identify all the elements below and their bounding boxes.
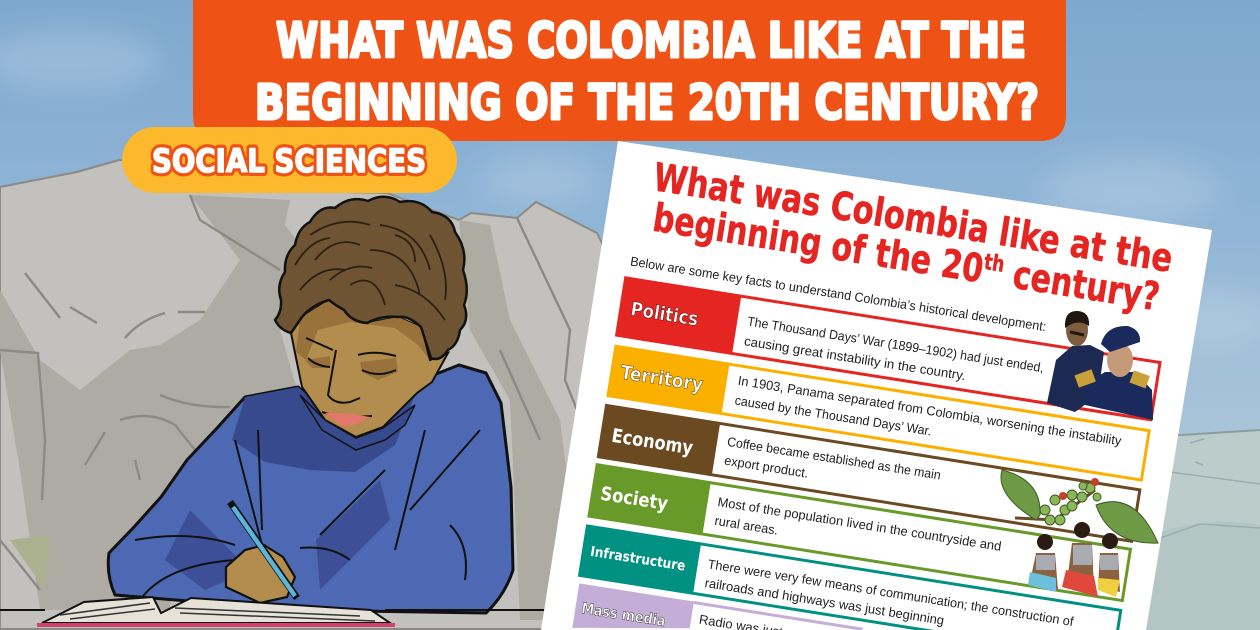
row: economy: Coffee became established as the main — [726, 434, 942, 483]
worksheet title: th — [982, 250, 1006, 278]
row: economy — [597, 404, 1140, 542]
eyes, nose and mouth — [306, 338, 396, 416]
worksheet content — [569, 153, 1180, 630]
illustration: women — [1028, 522, 1120, 597]
title banner — [193, 0, 1066, 141]
background: hazy valley — [1100, 430, 1260, 630]
worksheet title: century? — [999, 251, 1163, 320]
background: clouds — [0, 30, 1260, 350]
row: mass media — [572, 583, 863, 630]
hand — [226, 545, 295, 603]
row: society: Most of the population lived in the countryside and — [717, 494, 1002, 554]
hair curls — [295, 222, 446, 320]
sweater creases — [135, 430, 480, 600]
worksheet title: beginning of the 20 — [650, 196, 1083, 308]
banner heading — [255, 13, 1039, 131]
row: territory — [607, 345, 1149, 481]
row: economy: Economy — [610, 425, 695, 459]
face — [291, 300, 448, 437]
row: infrastructure — [578, 525, 1121, 630]
row: infrastructure: Infrastructure — [589, 544, 686, 575]
row: politics: causing great instability in the country. — [743, 333, 967, 383]
background: rocks — [0, 160, 610, 629]
sweater — [108, 365, 513, 613]
row: territory: caused by the Thousand Days’ War. — [734, 393, 933, 439]
row: economy: export product. — [723, 453, 810, 481]
row: society: rural areas. — [714, 513, 779, 538]
row: infrastructure: There were very few means of communication; the construction of — [707, 556, 1075, 629]
book — [42, 597, 390, 623]
badge: social sciences — [122, 127, 457, 193]
pencil — [230, 502, 297, 598]
banner heading: WHAT WAS COLOMBIA LIKE AT THE — [276, 13, 1026, 69]
row: politics: Politics — [629, 298, 700, 331]
badge: social sciences: SOCIAL SCIENCES — [152, 142, 426, 180]
row: politics — [615, 277, 1160, 421]
row: infrastructure: railroads and highways was just beginning — [704, 575, 945, 628]
hair — [275, 197, 467, 359]
row: territory: In 1903, Panama separated from Colombia, worsening the instability — [737, 373, 1123, 448]
intro text: Below are some key facts to understand Colombia’s historical development: — [629, 254, 1047, 334]
row: politics: The Thousand Days’ War (1899–1902) had just ended, — [746, 314, 1045, 375]
row: society — [588, 464, 1131, 602]
badge: social sciences: SOCIAL SCIENCES — [152, 142, 426, 180]
banner heading: BEGINNING OF THE 20TH CENTURY? — [255, 75, 1039, 131]
row: society: Society — [599, 483, 670, 515]
row: territory: Territory — [619, 361, 705, 396]
illustration: boy writing — [42, 197, 513, 623]
illustration: coffee branch — [1001, 470, 1158, 543]
collar — [300, 395, 415, 450]
table edge — [0, 610, 545, 627]
worksheet page — [541, 141, 1212, 630]
illustration: soldiers — [1047, 311, 1153, 420]
sweater shadow — [232, 380, 421, 472]
